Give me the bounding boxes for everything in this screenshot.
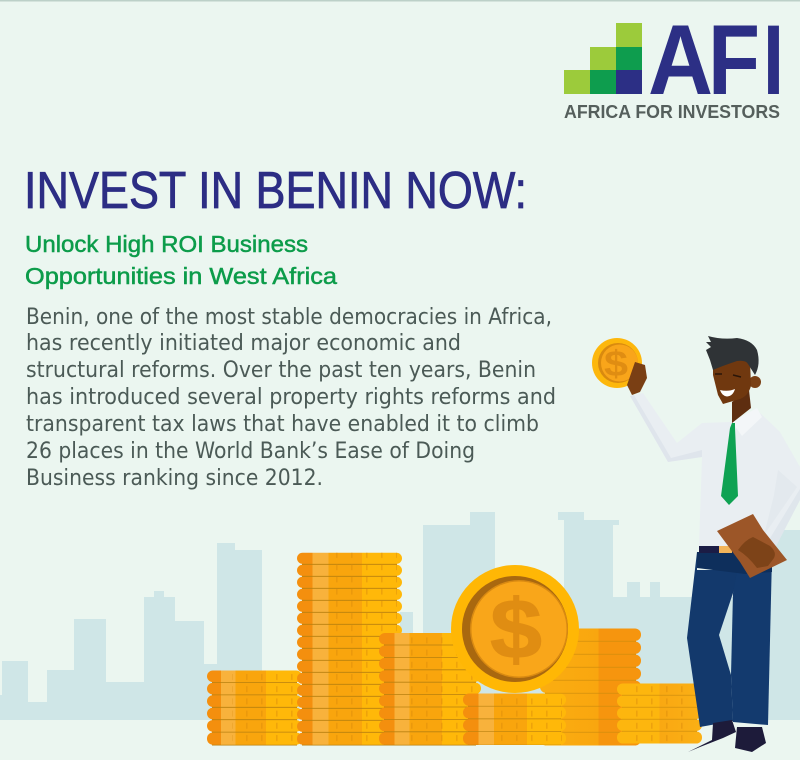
logo letters AFI — [648, 4, 784, 115]
coin stack middle — [379, 633, 481, 746]
subtitle: Unlock High ROI Business — [25, 231, 308, 257]
body paragraph: transparent tax laws that have enabled it to climb — [26, 412, 539, 437]
body paragraph: Benin, one of the most stable democracies in Africa, — [26, 305, 552, 330]
businessman holding coin — [592, 336, 800, 752]
coin stack right — [617, 684, 702, 744]
coin stack behind large coin — [540, 628, 641, 746]
eyes — [715, 374, 741, 377]
man neck and head — [706, 336, 761, 423]
coin stack tall — [297, 553, 402, 746]
body paragraph: Business ranking since 2012. — [26, 466, 323, 491]
smile — [720, 389, 735, 396]
coin stack front — [463, 694, 566, 745]
logo letters AFI: F — [708, 4, 760, 115]
logo stepped squares — [564, 23, 642, 94]
large dollar coin: $ — [490, 582, 542, 676]
man shirt — [630, 393, 800, 546]
man shoes — [688, 720, 766, 752]
small dollar coin: $ — [604, 343, 628, 384]
logo letters AFI: I — [763, 4, 784, 115]
green tie — [721, 423, 738, 505]
logo tagline: AFRICA FOR INVESTORS — [564, 102, 780, 122]
body paragraph: structural reforms. Over the past ten years, Benin — [26, 358, 536, 383]
body paragraph: has introduced several property rights reforms and — [26, 385, 556, 410]
subtitle — [25, 231, 338, 289]
small dollar coin — [592, 338, 642, 388]
large dollar coin — [451, 565, 579, 693]
city skyline — [0, 512, 800, 720]
logo letters AFI: A — [648, 4, 713, 115]
man hand holding coin — [627, 362, 647, 395]
body paragraph — [26, 305, 556, 491]
logo: Africa For Investors — [564, 4, 784, 122]
man trousers — [687, 552, 772, 727]
man belt — [699, 546, 740, 553]
body paragraph: has recently initiated major economic and — [26, 331, 461, 356]
title: INVEST IN BENIN NOW: — [24, 162, 527, 220]
coin stack far left — [207, 670, 302, 746]
hair — [706, 336, 759, 375]
body paragraph: 26 places in the World Bank’s Ease of Doing — [26, 439, 475, 464]
brown folder — [717, 514, 787, 578]
man hand on folder — [738, 537, 775, 568]
subtitle: Opportunities in West Africa — [25, 263, 338, 289]
